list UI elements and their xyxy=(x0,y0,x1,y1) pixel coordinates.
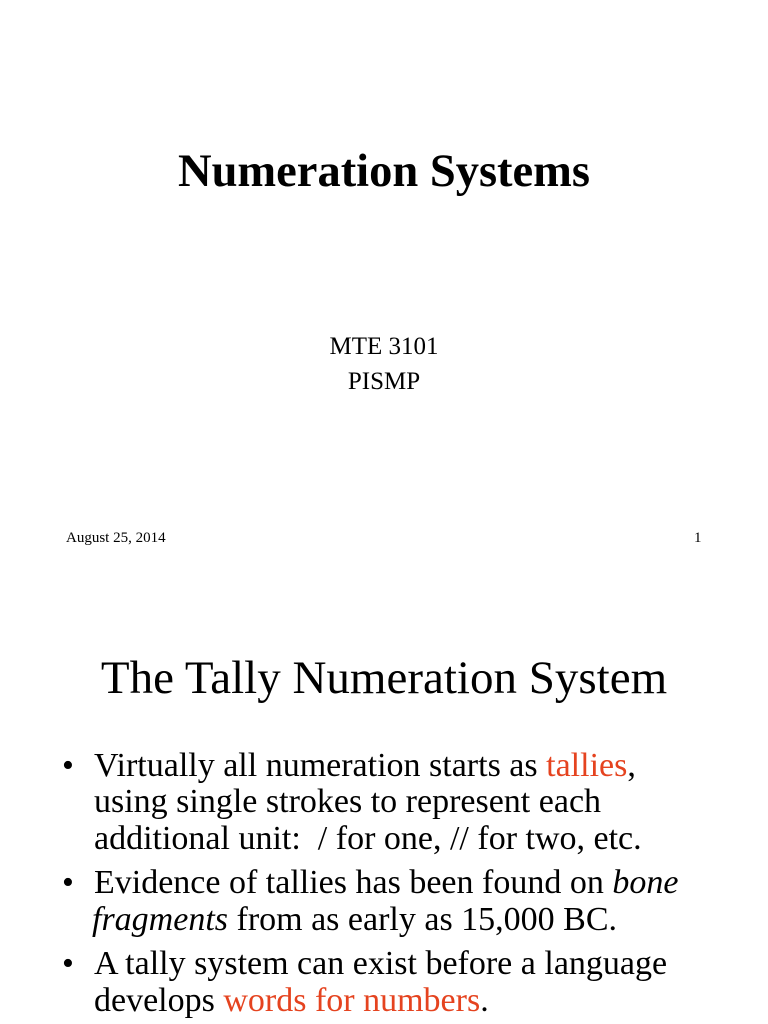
bullet 3: • xyxy=(62,945,74,982)
bullet 2: Evidence of tallies has been found on bone xyxy=(94,864,678,901)
bullet 1 xyxy=(62,747,642,857)
bullet 2: • xyxy=(62,864,74,901)
bullet 3: A tally system can exist before a language xyxy=(94,945,667,982)
bullet 1: using single strokes to represent each xyxy=(94,783,601,820)
course code: MTE 3101 xyxy=(329,333,439,360)
title: Numeration Systems xyxy=(178,146,590,197)
program: PISMP xyxy=(348,368,420,395)
bullet 3: develops words for numbers. xyxy=(94,982,489,1019)
slide 2 heading: The Tally Numeration System xyxy=(101,652,667,704)
bullet 1: additional unit: / for one, // for two, etc. xyxy=(94,820,642,857)
bullet 2 xyxy=(62,864,678,938)
page number: 1 xyxy=(694,530,702,546)
bullet 2: fragments from as early as 15,000 BC. xyxy=(92,901,617,938)
bullet 1: Virtually all numeration starts as tallies, xyxy=(94,747,636,784)
date footer: August 25, 2014 xyxy=(66,530,166,546)
bullet list xyxy=(62,747,678,1019)
bullet 3 xyxy=(62,945,667,1019)
bullet 1: • xyxy=(62,747,74,784)
